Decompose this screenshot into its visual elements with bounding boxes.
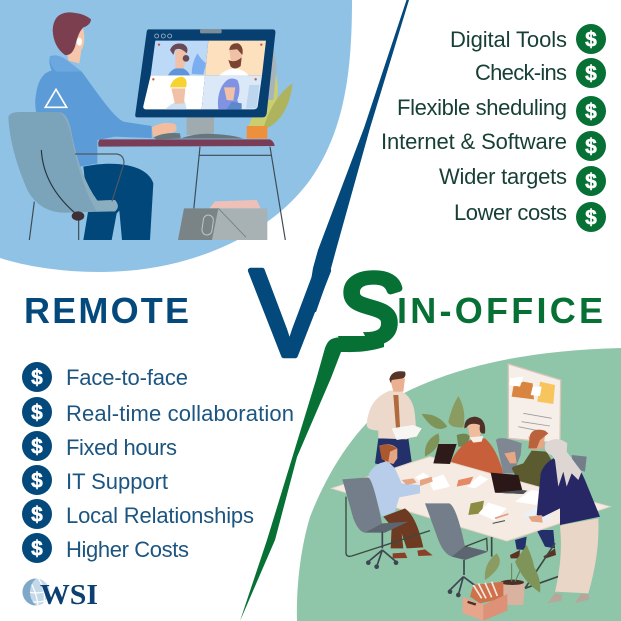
item: lower costs: Lower costs (454, 200, 567, 225)
logo: WSI: WSI (40, 579, 98, 611)
plant: back (422, 396, 470, 457)
man at right (504, 430, 556, 559)
item: higher costs: $ (31, 538, 43, 560)
item: it support (22, 465, 168, 495)
item: check-ins: $ (585, 62, 597, 86)
panel: remote background (0, 0, 352, 272)
item: fixed hours: Fixed hours (66, 435, 177, 460)
chair: front (425, 503, 488, 597)
heading: in-office: IN-OFFICE (397, 290, 603, 331)
item: internet and software (381, 129, 606, 161)
item: digital tools: Digital Tools (450, 27, 567, 52)
heading: remote: REMOTE (24, 290, 189, 331)
item: wider targets (439, 164, 606, 196)
item: wider targets: Wider targets (439, 164, 567, 189)
item: flexible scheduling: Flexible sheduling (397, 95, 567, 120)
item: local relationships (22, 499, 254, 529)
item: face-to-face (22, 362, 188, 392)
laptop and tablet (433, 444, 527, 494)
tail of S (240, 336, 384, 621)
item: it support: IT Support (66, 469, 168, 494)
item: fixed hours (22, 431, 177, 461)
item: check-ins (475, 58, 606, 88)
item: local relationships: $ (31, 504, 43, 526)
item: internet and software: Internet & Software (381, 129, 567, 154)
item: face-to-face: Face-to-face (66, 365, 188, 390)
item: digital tools (450, 24, 606, 54)
item: real-time collaboration: Real-time collaboration (66, 401, 294, 426)
item: real-time collaboration (22, 397, 294, 427)
item: higher costs: Higher Costs (66, 537, 189, 562)
back chair (496, 438, 522, 473)
papers and books (415, 473, 553, 524)
person head (53, 12, 91, 63)
panel: in-office background (297, 348, 621, 621)
item: local relationships: Local Relationships (66, 503, 254, 528)
seated man (368, 444, 433, 558)
leaning woman (528, 439, 600, 603)
standing man (367, 371, 422, 468)
big letter S: S (335, 254, 400, 363)
item: wider targets: $ (585, 170, 597, 194)
monitor (135, 29, 277, 139)
item: face-to-face: $ (31, 366, 43, 390)
item: real-time collaboration: $ (31, 402, 43, 424)
desk (98, 139, 285, 240)
table (332, 457, 610, 588)
list: in-office benefits (381, 24, 606, 232)
item: fixed hours: $ (31, 436, 43, 458)
item: internet and software: $ (585, 136, 597, 158)
plant (247, 72, 293, 139)
big letter V: V (250, 246, 329, 382)
list: remote benefits (22, 362, 294, 563)
chair: left (342, 477, 430, 569)
woman at table (450, 417, 503, 474)
item: check-ins: Check-ins (475, 60, 567, 85)
potted plant (485, 545, 540, 605)
storage boxes (178, 200, 267, 240)
item: flexible scheduling (397, 95, 606, 126)
illustration: office meeting (332, 364, 610, 621)
item: lower costs (454, 200, 606, 232)
illustration: remote worker at desk (8, 12, 293, 240)
chair (8, 112, 124, 240)
item: higher costs (22, 533, 189, 563)
item: flexible scheduling: $ (585, 100, 597, 124)
diagonal line: navy (306, 0, 409, 312)
item: it support: $ (31, 470, 43, 492)
whiteboard (508, 364, 561, 443)
person body (35, 56, 181, 167)
icon: globe (22, 578, 50, 606)
item: lower costs: $ (585, 206, 597, 230)
person legs (83, 164, 153, 240)
storage box (463, 582, 507, 621)
item: digital tools: $ (585, 28, 597, 52)
